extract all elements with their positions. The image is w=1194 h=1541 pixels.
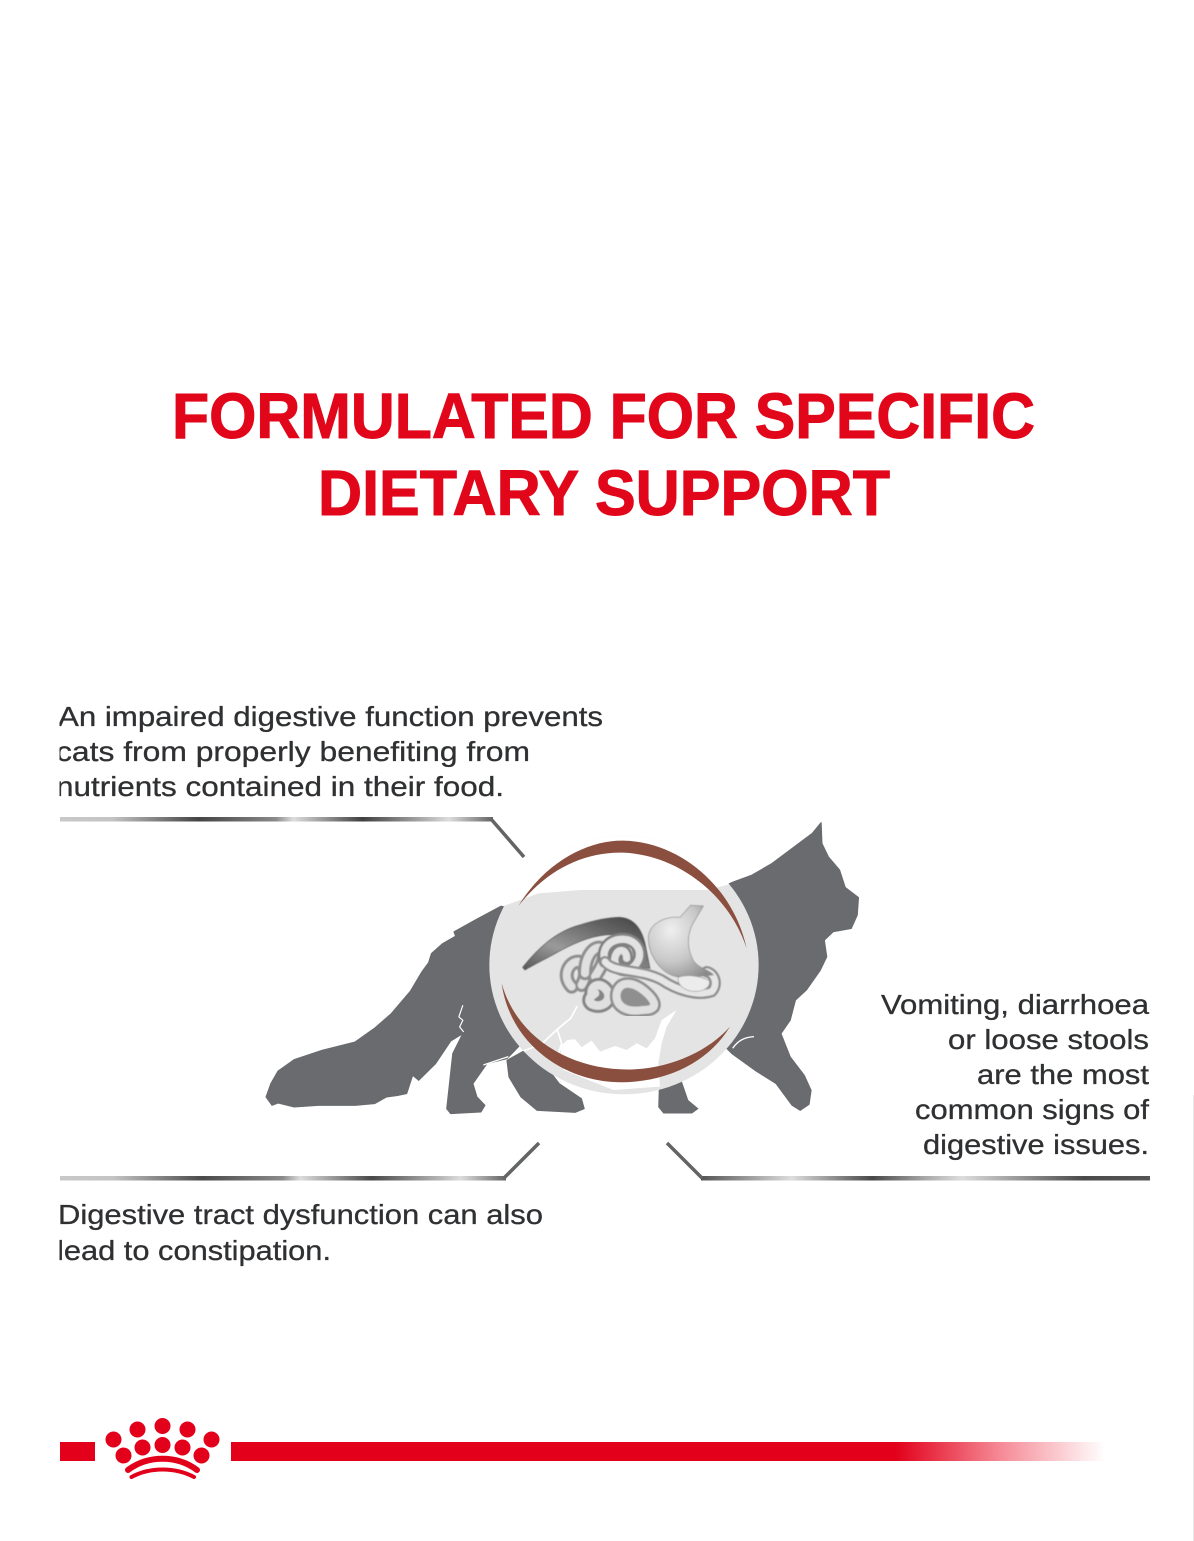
title: FORMULATED FOR SPECIFIC: [172, 380, 1035, 452]
callout line: bottom right: [667, 1143, 1150, 1180]
colon: [523, 917, 650, 970]
icon: royal crown logo: [106, 1418, 220, 1477]
text block: vomiting and diarrhoea: [881, 989, 1149, 1160]
cat silhouette: [266, 823, 858, 1114]
red footer bar: [60, 1442, 1105, 1461]
text block: constipation: Digestive tract dysfunction can also: [58, 1199, 543, 1230]
text block: vomiting and diarrhoea: Vomiting, diarrhoea: [881, 989, 1149, 1020]
text block: impaired digestive function: An impaired digestive function prevents: [58, 701, 603, 732]
text block: impaired digestive function: cats from properly benefiting from: [56, 736, 530, 767]
callout line: top left: [60, 817, 524, 857]
body cross-section: [483, 884, 759, 1094]
text block: constipation: lead to constipation.: [57, 1235, 331, 1266]
title: [172, 380, 1035, 529]
text block: vomiting and diarrhoea: are the most: [977, 1059, 1149, 1090]
belly white area: [560, 1010, 677, 1090]
title: DIETARY SUPPORT: [318, 457, 890, 529]
stomach: [648, 905, 713, 977]
text block: constipation: [57, 1199, 543, 1266]
callout line: bottom left: [60, 1143, 539, 1180]
text block: impaired digestive function: [60, 706, 602, 796]
digestive organs: [523, 905, 715, 1011]
right edge line: [1193, 1095, 1194, 1541]
text block: impaired digestive function: nutrients contained in their food.: [56, 771, 504, 802]
brown ring arcs: [502, 841, 747, 1082]
text block: vomiting and diarrhoea: or loose stools: [948, 1024, 1149, 1055]
pancreas: [678, 976, 709, 991]
text block: vomiting and diarrhoea: digestive issues.: [923, 1129, 1149, 1160]
small intestine coils: [567, 939, 715, 1011]
text block: vomiting and diarrhoea: common signs of: [915, 1094, 1149, 1125]
cat illustration: [266, 823, 858, 1114]
